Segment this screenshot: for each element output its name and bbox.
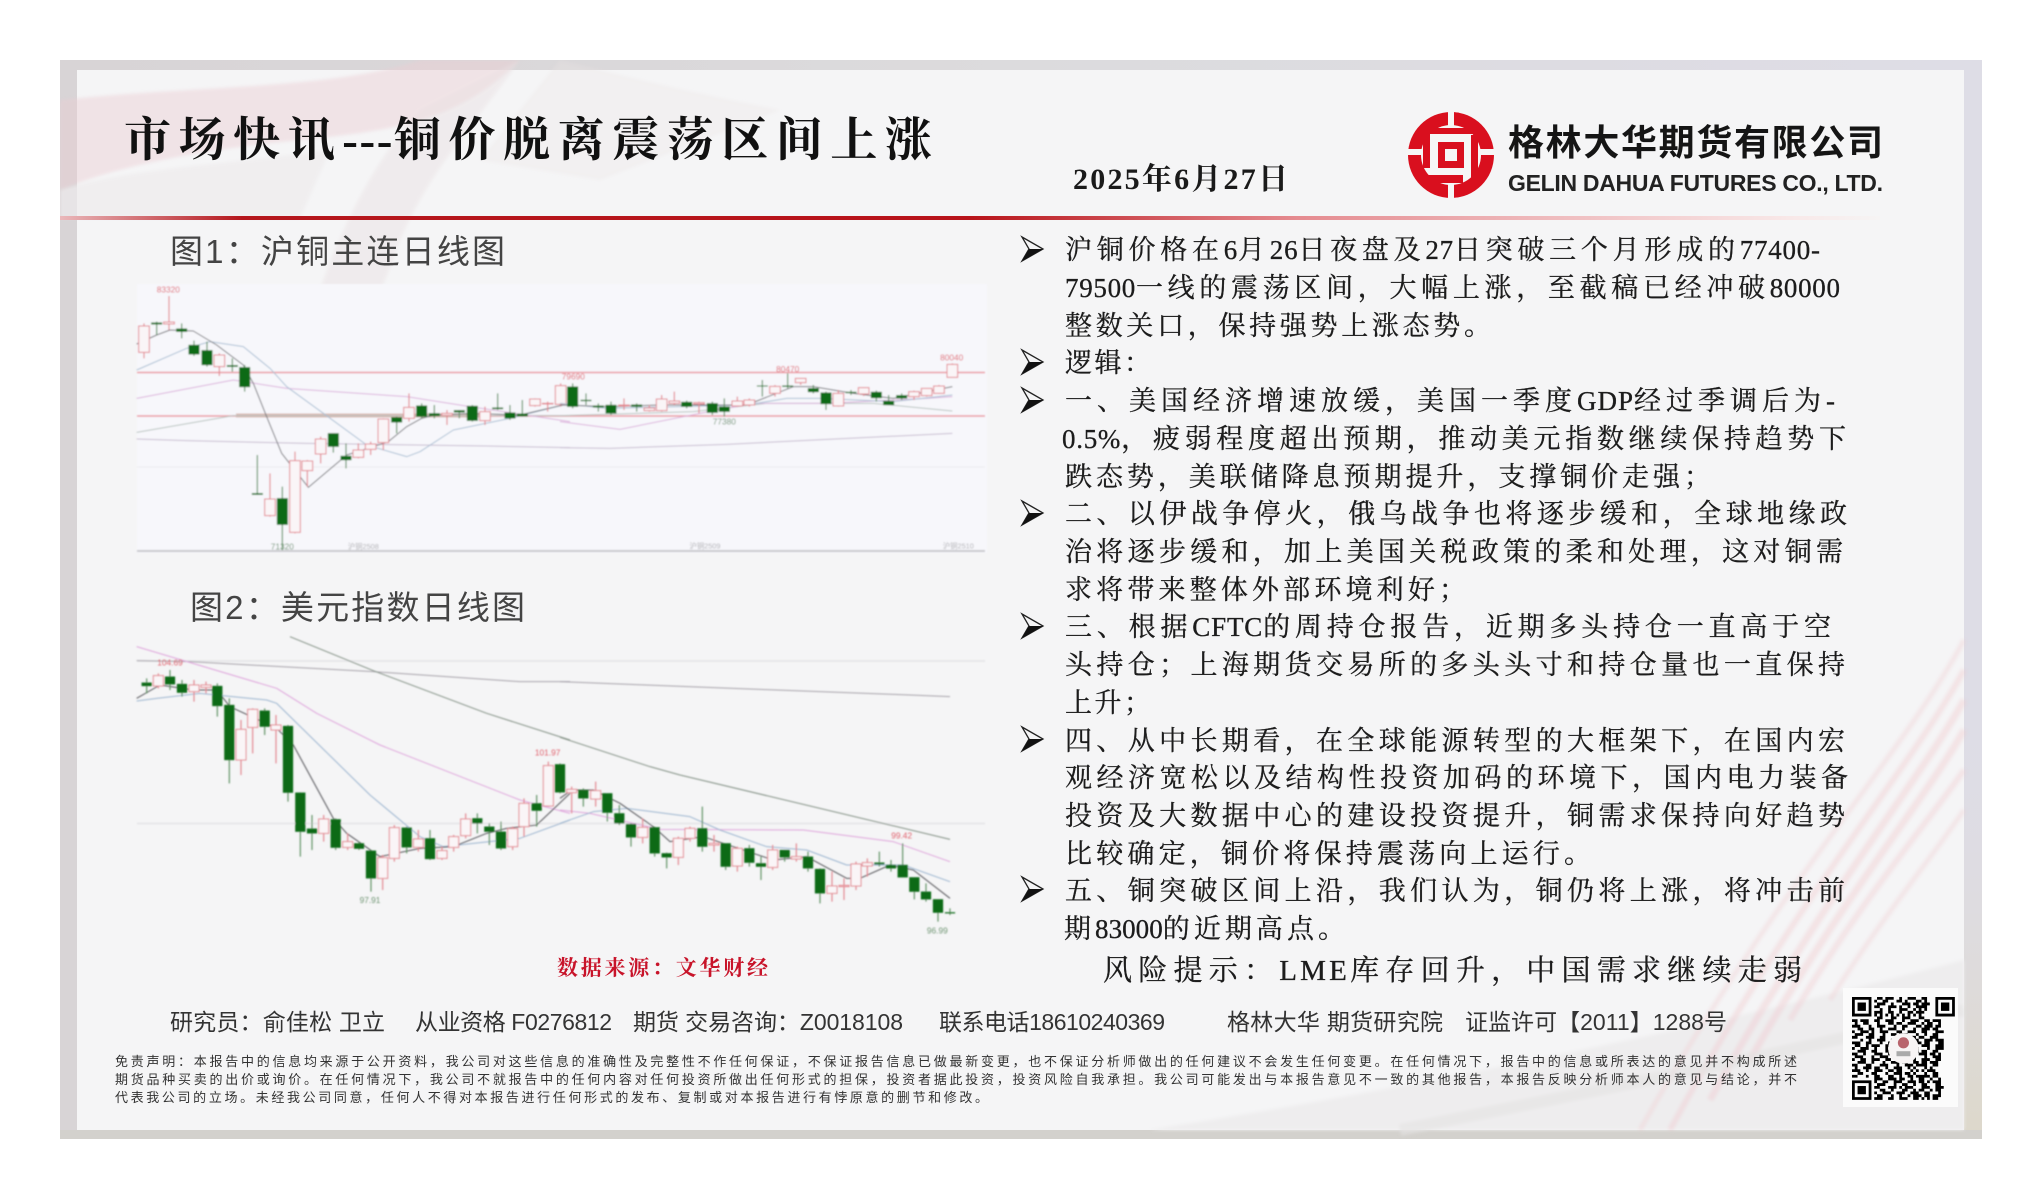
analysis text block: 治将逐步缓和，加上美国关税政策的柔和处理，这对铜需 [1065,537,1847,567]
analysis text block: 三、根据CFTC的周持仓报告，近期多头持仓一直高于空 [1065,612,1835,642]
chart 1 left half candles: 沪铜2508 [348,542,379,551]
company name: 格林大华期货有限公司 [1508,122,1883,163]
chart: US dollar index daily candlesticks [137,637,985,936]
chart 1 right half candles: 80040 [940,352,964,362]
analysis text block: 跌态势，美联储降息预期提升，支撑铜价走强； [1065,462,1715,492]
analysis text block: 逻辑： [1065,348,1155,378]
researcher contact line: 证监许可【2011】1288号 [1465,1009,1727,1035]
heading: figure 2: 图2：美元指数日线图 [190,589,525,626]
researcher contact line: 联系电话18610240369 [939,1009,1165,1035]
chart 1 right half candles: 沪铜2509 [690,542,720,551]
analysis text block: 头持仓；上海期货交易所的多头头寸和持仓量也一直保持 [1065,650,1849,680]
analysis text block: 二、以伊战争停火，俄乌战争也将逐步缓和，全球地缘政 [1065,499,1851,529]
icon: list bullets [1022,237,1043,901]
chart 1 reference lines [137,284,987,553]
analysis text block: 比较确定，铜价将保持震荡向上运行。 [1065,839,1595,869]
chart 1 right half candles [560,352,974,551]
title: 市场快讯---铜价脱离震荡区间上涨 [124,115,938,167]
company name [1508,122,1883,196]
researcher contact line: 期货 交易咨询：Z0018108 [633,1009,903,1035]
chart 1 right half candles: 沪铜2510 [943,542,974,551]
chart 1 left half candles: 71320 [271,541,294,551]
chart: copper daily candlesticks [137,284,987,553]
analysis text block: 整数关口，保持强势上涨态势。 [1065,311,1495,341]
chart 2 right half candles: 99.42 [891,831,912,841]
analysis text block: 五、铜突破区间上沿，我们认为，铜仍将上涨，将冲击前 [1065,876,1849,906]
analysis text block: 沪铜价格在6月26日夜盘及27日突破三个月形成的77400- [1065,235,1820,265]
header rule [60,216,1880,220]
analysis text block: 79500一线的震荡区间，大幅上涨，至截稿已经冲破80000 [1065,273,1840,303]
chart 1 right half candles: 77380 [713,417,736,427]
analysis text block: 一、美国经济增速放缓，美国一季度GDP经过季调后为- [1065,386,1835,416]
chart 2 left half candles [137,637,570,905]
chart 1 right half candles: 80470 [776,364,800,374]
chart 1 left half candles [137,285,585,551]
chart 2 right half candles: 96.99 [927,926,948,936]
analysis text block: 0.5%，疲弱程度超出预期，推动美元指数继续保持趋势下 [1062,424,1850,454]
researcher contact line: 从业资格 F0276812 [415,1009,612,1035]
chart 2 left half candles: 104.69 [157,658,183,668]
analysis text block: 观经济宽松以及结构性投资加码的环境下，国内电力装备 [1065,763,1852,793]
researcher contact line: 研究员：俞佳松 卫立 [170,1009,385,1035]
analysis text block [1062,235,1852,944]
heading: figure 1: 图1：沪铜主连日线图 [170,233,505,270]
analysis text block: 求将带来整体外部环境利好； [1065,575,1470,605]
chart 2 reference lines [137,661,985,824]
icon: company logo [1406,110,1496,200]
chart 2 left half candles: 97.91 [360,895,381,905]
disclaimer: 代表我公司的立场。未经我公司同意，任何人不得对本报告进行任何形式的发布、复制或对本报告进行有悖原意的删节和修改。 [115,1090,988,1105]
chart 1 left half candles: 83320 [157,285,180,295]
data source note: 数据来源：文华财经 [557,956,769,980]
chart 2 left half candles: 101.97 [535,748,561,758]
chart 2 right half candles [560,682,955,936]
researcher contact line: 格林大华 期货研究院 [1227,1009,1443,1035]
company name: GELIN DAHUA FUTURES CO., LTD. [1508,170,1883,196]
disclaimer: 免责声明：本报告中的信息均来源于公开资料，我公司对这些信息的准确性及完整性不作任何保证，不保证报告信息已做最新变更，也不保证分析师做出的任何建议不会发生任何变更。在任何情况下，报告中的信息或所表达的意见并不构成所述 [115,1054,1797,1069]
analysis text block: 投资及大数据中心的建设投资提升，铜需求保持向好趋势 [1065,801,1849,831]
risk warning: 风险提示：LME库存回升，中国需求继续走弱 [1103,954,1805,987]
date: 2025年6月27日 [1073,163,1288,196]
analysis text block: 期83000的近期高点。 [1064,914,1349,944]
disclaimer [115,1054,1797,1105]
analysis text block: 四、从中长期看，在全球能源转型的大框架下，在国内宏 [1065,726,1849,756]
icon: QR code [1843,988,1958,1107]
chart 1 left half candles: 79690 [562,371,585,381]
researcher contact line [170,1009,1727,1035]
disclaimer: 期货品种买卖的出价或询价。在任何情况下，我公司不就报告中的任何内容对任何投资所做出任何形式的担保，投资者据此投资，投资风险自我承担。我公司可能发出与本报告意见不一致的其他报告，本报告反映分析师本人的意见与结论，并不 [115,1072,1797,1087]
analysis text block: 上升； [1065,688,1155,718]
